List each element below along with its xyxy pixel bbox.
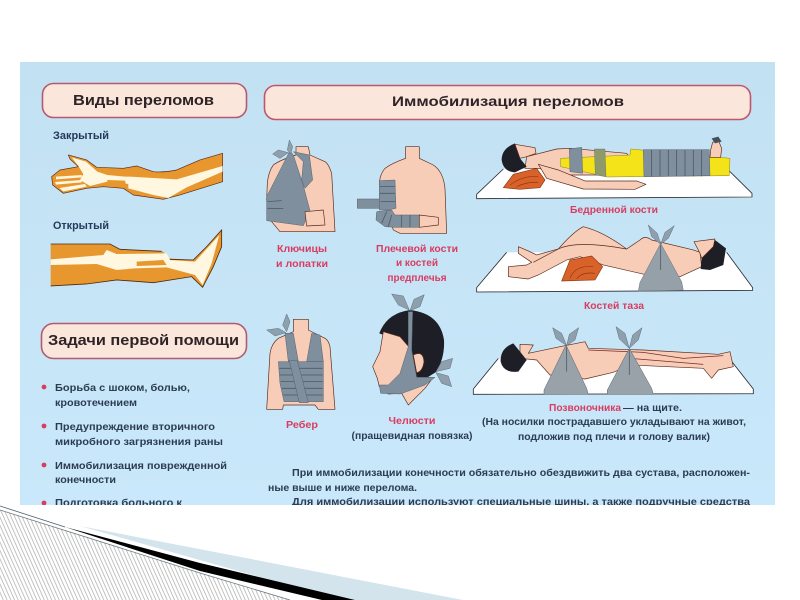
- icon: closed fracture arm: [52, 153, 223, 199]
- heading: immobilization of fractures: Иммобилизация переломов: [392, 93, 624, 109]
- body text: immobilization note: ные выше и ниже перелома.: [268, 482, 417, 494]
- body text: immobilization note: Для иммобилизации используют специальные шины, а также подручные средства: [292, 496, 750, 508]
- decorative corner wedge: [0, 506, 463, 600]
- label: humerus and forearm bones: предплечья: [388, 272, 446, 284]
- label: jaw, sling bandage: (пращевидная повязка): [352, 430, 472, 442]
- background panel: [20, 62, 775, 505]
- label: clavicle and scapula: и лопатки: [276, 258, 328, 270]
- figure: humerus and forearm splint: [357, 147, 447, 233]
- bullet list: first aid tasks: микробного загрязнения раны: [55, 436, 223, 448]
- figure: femur immobilization: [477, 137, 752, 199]
- heading: types of fractures: Виды переломов: [73, 92, 214, 109]
- label: spine on a board: — на щите.: [623, 402, 682, 414]
- white cover below panel: [0, 505, 800, 600]
- label: jaw, sling bandage: Челюсти: [388, 415, 436, 427]
- label: humerus and forearm bones: и костей: [396, 257, 438, 269]
- label: spine on a board: [482, 402, 746, 443]
- body text: immobilization note: При иммобилизации конечности обязательно обездвижить два сустава, расположен-: [292, 467, 751, 479]
- icon: open fracture leg: [51, 230, 222, 287]
- label: pelvic bones: Костей таза: [584, 300, 644, 312]
- label: clavicle and scapula: [276, 243, 328, 270]
- figure: spine immobilization: [473, 327, 753, 394]
- figure: jaw sling bandage: [373, 294, 453, 405]
- label: ribs: Ребер: [286, 419, 318, 431]
- label: spine on a board: Позвоночника: [549, 402, 621, 414]
- heading: types of fractures: [42, 84, 246, 118]
- figure: pelvis immobilization: [477, 225, 753, 292]
- label: jaw, sling bandage: [352, 415, 472, 442]
- body text: immobilization note: [268, 467, 751, 508]
- label: clavicle and scapula: Ключицы: [277, 243, 327, 255]
- figure: clavicle sling: [267, 140, 335, 232]
- bullet list: first aid tasks: конечности: [55, 474, 116, 486]
- heading: first aid tasks: [42, 324, 246, 358]
- label: humerus and forearm bones: Плечевой кости: [376, 243, 458, 255]
- heading: immobilization of fractures: [264, 86, 750, 120]
- bullet list: first aid tasks: Предупреждение вторичного: [55, 421, 215, 433]
- label: open fracture: Открытый: [53, 220, 109, 232]
- figure: ribs bandage: [267, 314, 335, 409]
- label: spine on a board: (На носилки пострадавшего укладывают на живот,: [482, 416, 746, 428]
- label: closed fracture: Закрытый: [53, 130, 109, 142]
- label: spine on a board: подложив под плечи и голову валик): [518, 431, 710, 443]
- bullet list: first aid tasks: Борьба с шоком, болью,: [55, 382, 190, 394]
- label: femur: Бедренной кости: [570, 204, 658, 216]
- bullet list: first aid tasks: [42, 382, 227, 509]
- bullet list: first aid tasks: кровотечением: [55, 397, 137, 409]
- bullet list: first aid tasks: Подготовка больного к: [55, 497, 183, 509]
- heading: first aid tasks: Задачи первой помощи: [48, 332, 239, 349]
- label: humerus and forearm bones: [376, 243, 458, 284]
- bullet list: first aid tasks: Иммобилизация поврежденной: [55, 460, 227, 472]
